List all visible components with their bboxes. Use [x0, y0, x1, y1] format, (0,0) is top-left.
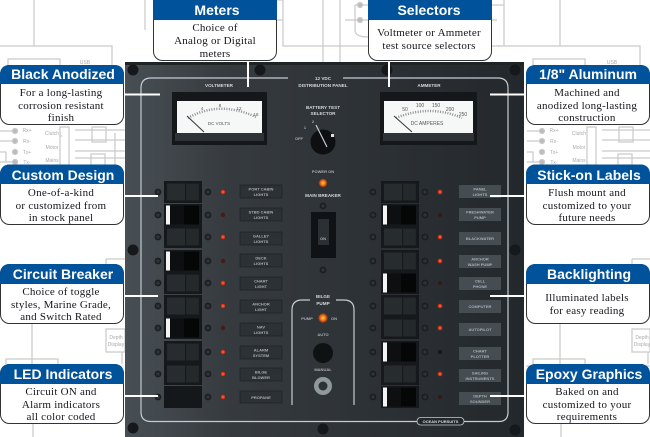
background wiring schematic: USB: [80, 60, 91, 66]
callout: black anodized: Black Anodized: [11, 66, 115, 82]
callout: aluminum: construction: [558, 112, 616, 124]
callout: custom design: One-of-a-kind: [28, 187, 94, 199]
right circuit labels: BLACKWATER: [466, 236, 494, 241]
right circuit labels: PUMP: [474, 215, 486, 220]
power on indicator: POWER ON: [312, 169, 334, 174]
right circuit labels: ANCHOR: [471, 256, 489, 262]
callout: backlighting: [526, 264, 650, 324]
panel outline: [141, 78, 508, 422]
background wiring schematic: Display: [634, 342, 650, 348]
callout: stick-on labels: [526, 164, 650, 224]
background wiring schematic: Tx+: [550, 150, 558, 156]
callout: circuit breaker: [0, 264, 124, 324]
callout: backlighting: Illuminated labels: [545, 292, 629, 304]
left circuit labels: SYSTEM: [253, 353, 270, 358]
panel title: [298, 76, 348, 88]
left circuit labels: GALLEY: [253, 234, 269, 238]
callout: selectors: Selectors: [397, 2, 461, 18]
callout: stick-on labels: future needs: [558, 212, 616, 224]
callout: selectors: Voltmeter or Ammeter: [377, 27, 481, 39]
background wiring schematic: Tx+: [23, 150, 31, 156]
main breaker: [305, 193, 342, 273]
callout: led indicators: Circuit ON and: [25, 386, 97, 398]
background wiring schematic: Rx-: [550, 139, 558, 145]
left circuit labels: LIGHTS: [254, 192, 269, 197]
background wiring schematic: USB: [607, 60, 618, 66]
callout: backlighting: for easy reading: [550, 305, 625, 317]
background wiring schematic: Motor: [573, 145, 586, 151]
left circuit labels: LIGHTS: [254, 330, 269, 335]
callout: stick-on labels: Flush mount and: [548, 187, 626, 199]
meter: ammeter: [380, 83, 477, 145]
left circuit labels: BILGE: [255, 370, 267, 374]
meter: voltmeter: 16: [253, 112, 259, 117]
left circuit labels: DECK: [255, 256, 267, 260]
callout: led indicators: [0, 364, 124, 424]
meter: voltmeter: DC VOLTS: [208, 121, 230, 126]
left circuit labels: PROPANE: [251, 395, 271, 400]
background wiring schematic: Depth: [109, 335, 123, 341]
background wiring schematic: Rx+: [549, 128, 559, 134]
right circuit labels: SAILING: [472, 370, 488, 376]
callout: epoxy graphics: Baked on and: [555, 386, 619, 398]
right circuit labels: CELL: [475, 278, 486, 284]
meter: ammeter: DC AMPERES: [411, 121, 444, 127]
background wiring schematic: Tx-: [550, 160, 558, 166]
left circuit labels: NAV: [257, 324, 265, 330]
callout: black anodized: [0, 65, 124, 124]
callout: led indicators: Alarm indicators: [22, 399, 100, 411]
panel: distribution panel: [125, 62, 524, 437]
callout: custom design: in stock panel: [29, 212, 93, 224]
bilge pump: ON: [331, 316, 337, 321]
callout: stick-on labels: customized to your: [543, 200, 631, 212]
callout: epoxy graphics: customized to your: [543, 399, 631, 411]
panel title: DISTRIBUTION PANEL: [298, 83, 348, 88]
background wiring schematic: Rx+: [22, 128, 32, 134]
background wiring schematic: Tx-: [23, 160, 31, 166]
battery test selector: 1: [304, 125, 307, 130]
right circuit labels: WASH PUMP: [468, 262, 493, 267]
background wiring schematic: Clutch: [572, 131, 586, 137]
meter: voltmeter: VOLTMETER: [205, 83, 234, 88]
bilge pump: AUTO: [317, 332, 329, 337]
background wiring schematic: Motor: [46, 145, 59, 151]
battery test selector: BATTERY TEST: [306, 105, 340, 110]
meter: voltmeter: 12: [236, 106, 242, 111]
right circuit labels: COMPUTER: [469, 304, 492, 309]
meter: voltmeter: 8: [219, 103, 222, 108]
callout: meters: [153, 0, 277, 60]
callout: epoxy graphics: [526, 364, 650, 424]
mounting holes: [128, 64, 520, 436]
battery test selector: [295, 105, 340, 154]
callout: epoxy graphics: Epoxy Graphics: [536, 366, 643, 382]
callout: meters: meters: [200, 48, 230, 60]
callout: stick-on labels: Stick-on Labels: [537, 167, 641, 183]
background wiring schematic: Display: [108, 342, 125, 348]
right circuit labels: FRESHWATER: [466, 210, 494, 214]
bilge pump: BILGE: [316, 294, 330, 299]
callout: aluminum: 1/8" Aluminum: [539, 66, 637, 82]
callout: custom design: or customized from: [16, 200, 107, 212]
background wiring schematic: Mains: [572, 158, 586, 164]
right circuit labels: PANEL: [473, 186, 487, 192]
panel title: 12 VDC: [315, 76, 332, 81]
callout: circuit breaker: Choice of toggle: [22, 286, 100, 298]
background wiring schematic: Mains: [45, 158, 59, 164]
left circuit labels: STBD CABIN: [249, 210, 273, 214]
left circuit labels: ALARM: [254, 348, 269, 352]
background wiring schematic: Depth: [635, 335, 649, 341]
callout: epoxy graphics: requirements: [557, 411, 617, 423]
callout: selectors: test source selectors: [382, 40, 476, 52]
left circuit labels: CHART: [254, 278, 269, 284]
callout: custom design: [0, 164, 124, 224]
right circuit labels: [459, 185, 501, 405]
left circuit labels: LIGHTS: [254, 215, 269, 220]
right circuit labels: INSTRUMENTS: [466, 376, 495, 381]
right circuit labels: SOUNDER: [470, 399, 490, 404]
callout: aluminum: Machined and: [554, 87, 620, 99]
meter: voltmeter: [172, 83, 267, 145]
callout: black anodized: corrosion resistant: [18, 100, 104, 112]
right circuit labels: PHONE: [473, 284, 487, 289]
right circuit labels: PLOTTER: [471, 354, 489, 359]
callout: aluminum: anodized long-lasting: [537, 100, 637, 112]
callout: circuit breaker: and Switch Rated: [20, 311, 102, 323]
left circuit labels: LIGHT: [255, 284, 268, 289]
right circuit labels: LIGHTS: [473, 192, 488, 197]
meter: ammeter: 50: [402, 107, 408, 113]
power on indicator: [312, 169, 334, 188]
meter: ammeter: AMMETER: [417, 83, 441, 88]
bilge pump: PUMP: [316, 301, 330, 306]
callout: circuit breaker: Circuit Breaker: [13, 266, 114, 282]
maker badge: [417, 418, 464, 425]
callout: selectors: [368, 0, 492, 60]
pointer lines: [124, 60, 526, 396]
callout: meters: Meters: [194, 2, 240, 18]
main breaker: MAIN BREAKER: [305, 193, 342, 198]
left circuit labels: ANCHOR: [252, 302, 270, 306]
meter: ammeter: 250: [459, 112, 467, 118]
callout: backlighting: Backlighting: [547, 266, 631, 282]
maker badge: OCEAN PURSUITS: [423, 419, 459, 424]
left breaker column: [155, 181, 226, 408]
background wiring schematic: Rx-: [23, 139, 31, 145]
callout: circuit breaker: styles, Marine Grade,: [11, 299, 111, 311]
callout: aluminum: [526, 65, 650, 124]
meter: ammeter: 200: [446, 107, 454, 113]
bilge pump: MANUAL: [314, 367, 332, 372]
right circuit labels: CHART: [473, 348, 488, 354]
bilge pump: PUMP: [301, 316, 313, 321]
battery test selector: 2: [312, 119, 315, 124]
battery test selector: SELECTOR: [311, 111, 336, 116]
callout: led indicators: LED Indicators: [14, 366, 113, 382]
left circuit labels: LIGHTS: [254, 239, 269, 244]
right circuit labels: DEPTH: [473, 394, 487, 398]
left circuit labels: LIGHT: [255, 307, 268, 312]
right breaker column: [370, 181, 442, 408]
meter: voltmeter: 4: [201, 106, 204, 111]
callout: meters: Analog or Digital: [174, 35, 256, 47]
callout: black anodized: For a long-lasting: [20, 87, 103, 99]
callout: custom design: Custom Design: [12, 167, 114, 183]
left circuit labels: LIGHTS: [254, 261, 269, 266]
left circuit labels: BLOWER: [252, 375, 270, 380]
left circuit labels: [240, 185, 282, 403]
left circuit labels: PORT CABIN: [249, 186, 274, 192]
callout: led indicators: all color coded: [26, 411, 96, 423]
callout: black anodized: finish: [48, 112, 75, 124]
battery test selector: OFF: [295, 136, 304, 141]
background wiring schematic: Clutch: [45, 131, 59, 137]
bilge pump: [292, 294, 354, 405]
right circuit labels: AUTOPILOT: [468, 327, 492, 332]
main breaker: ON: [320, 236, 326, 241]
meter: ammeter: 100: [416, 103, 424, 109]
callout: meters: Choice of: [192, 22, 238, 34]
meter: ammeter: 150: [432, 103, 440, 109]
